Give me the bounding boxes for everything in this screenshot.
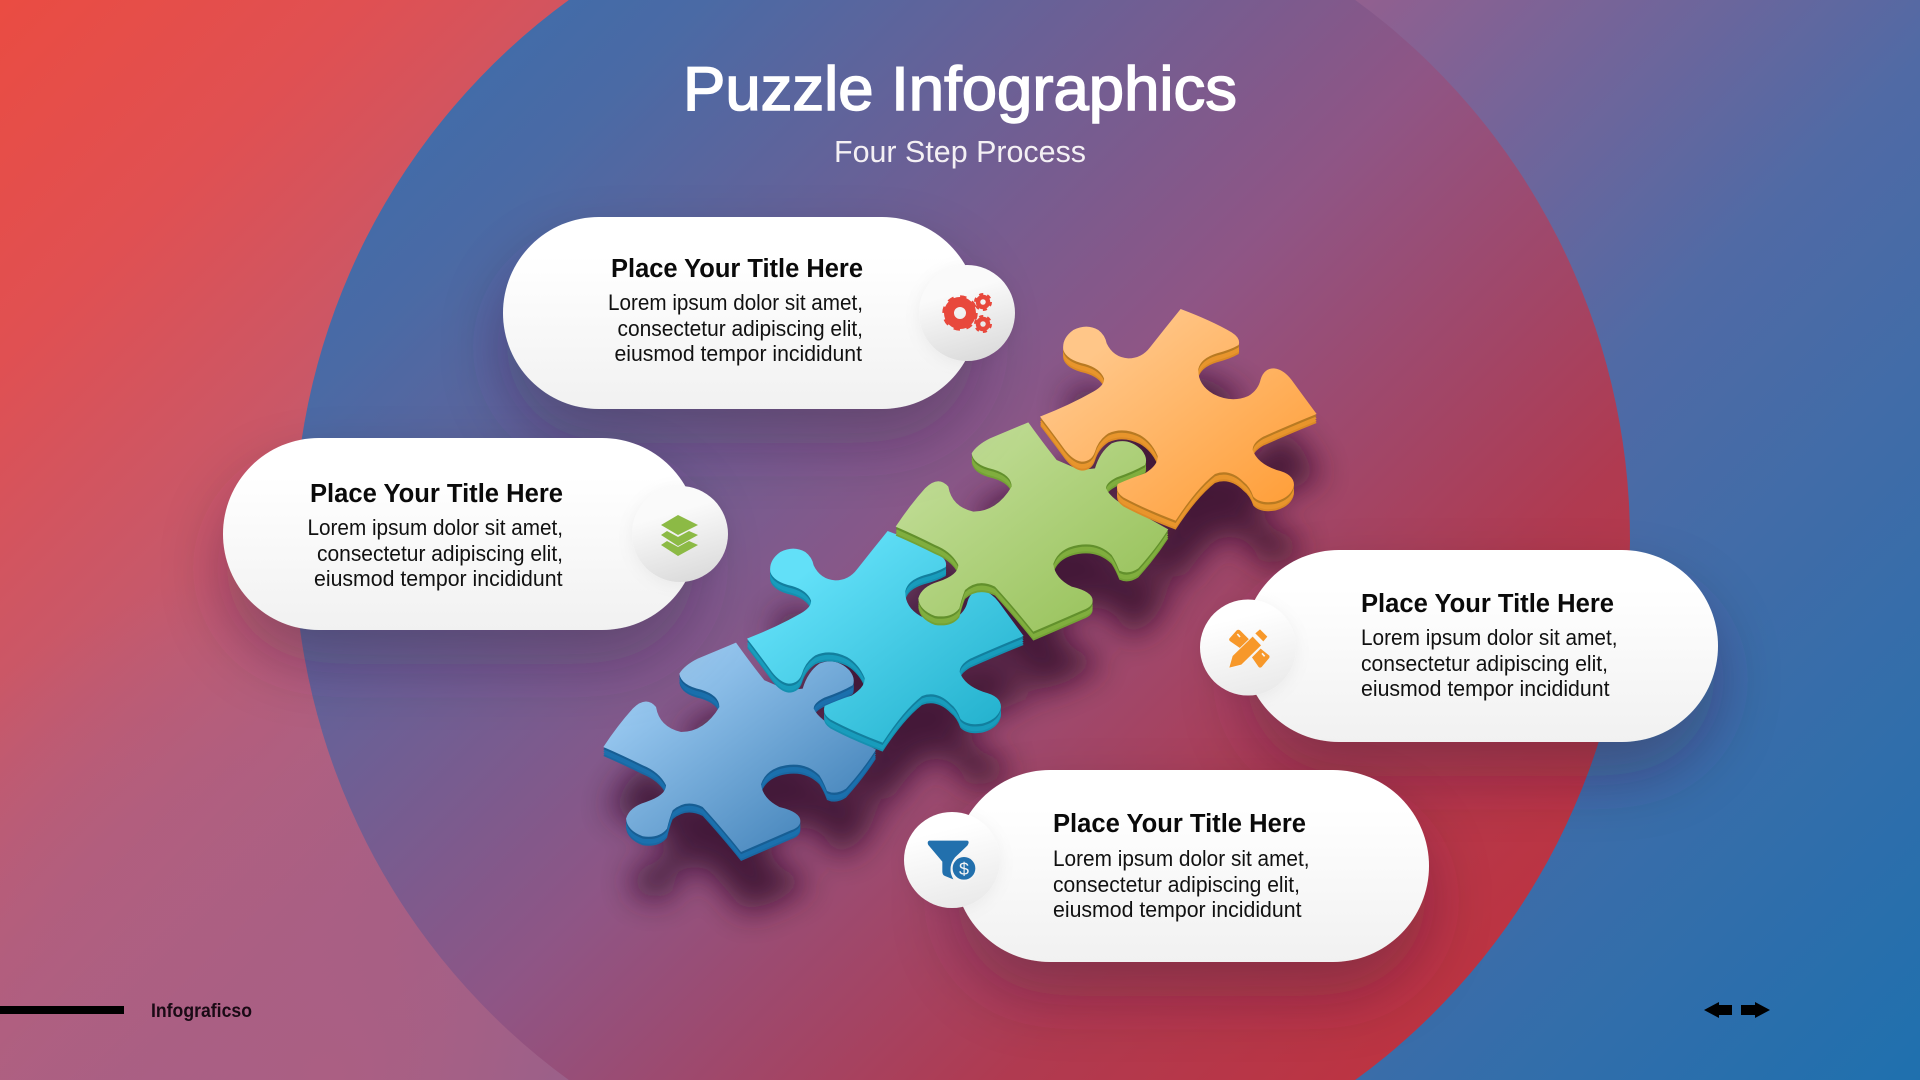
icon: funnel with dollar: $ — [959, 859, 969, 879]
puzzle piece: orange — [1040, 309, 1317, 530]
icon disc: pencil and ruler — [1200, 600, 1296, 696]
card title: Place Your Title Here — [611, 255, 863, 283]
background lower-left tint — [0, 560, 850, 1080]
card body text: eiusmod tempor incididunt — [614, 341, 862, 366]
panel: right card — [1200, 550, 1718, 742]
title: Puzzle Infographics — [683, 55, 1237, 124]
puzzle piece: blue — [603, 643, 876, 861]
icon: left arrow — [1704, 1002, 1732, 1018]
card body text: consectetur adipiscing elit, — [317, 541, 563, 566]
footer line — [0, 1006, 124, 1014]
card body text — [308, 515, 563, 591]
panel: bottom card — [904, 770, 1429, 962]
card body text: Lorem ipsum dolor sit amet, — [608, 290, 863, 315]
icon: funnel with dollar — [928, 841, 976, 881]
card body text: consectetur adipiscing elit, — [1053, 872, 1300, 897]
footer brand: Infograficso — [151, 1001, 252, 1022]
puzzle piece: cyan — [747, 531, 1024, 752]
card body text: Lorem ipsum dolor sit amet, — [1053, 846, 1310, 871]
icon: gears — [944, 294, 990, 332]
puzzle shadows — [609, 371, 1322, 914]
background circle — [294, 0, 1630, 1080]
subtitle: Four Step Process — [834, 134, 1086, 169]
panel: top card — [503, 217, 1015, 409]
puzzle graphic — [603, 309, 1317, 861]
icon disc: layers — [632, 486, 728, 582]
card title: Place Your Title Here — [1361, 590, 1614, 618]
icon: pencil and ruler — [1229, 629, 1270, 668]
card body text: eiusmod tempor incididunt — [1053, 897, 1302, 922]
icon: right arrow — [1741, 1002, 1770, 1018]
card body text: eiusmod tempor incididunt — [1361, 676, 1610, 701]
card body text: Lorem ipsum dolor sit amet, — [308, 515, 563, 540]
icon disc: gears — [919, 265, 1015, 361]
card body text — [1053, 846, 1310, 922]
card body text: consectetur adipiscing elit, — [618, 316, 863, 341]
card body text: eiusmod tempor incididunt — [314, 566, 562, 591]
panel: left card — [223, 438, 728, 630]
card title: Place Your Title Here — [1053, 810, 1306, 838]
card title: Place Your Title Here — [310, 480, 563, 508]
card body text — [1361, 625, 1618, 701]
icon disc: funnel — [904, 812, 1000, 908]
puzzle piece: green — [896, 422, 1168, 641]
icon: layers — [661, 515, 698, 556]
card body text: consectetur adipiscing elit, — [1361, 651, 1608, 676]
card body text — [608, 290, 863, 366]
card body text: Lorem ipsum dolor sit amet, — [1361, 625, 1618, 650]
